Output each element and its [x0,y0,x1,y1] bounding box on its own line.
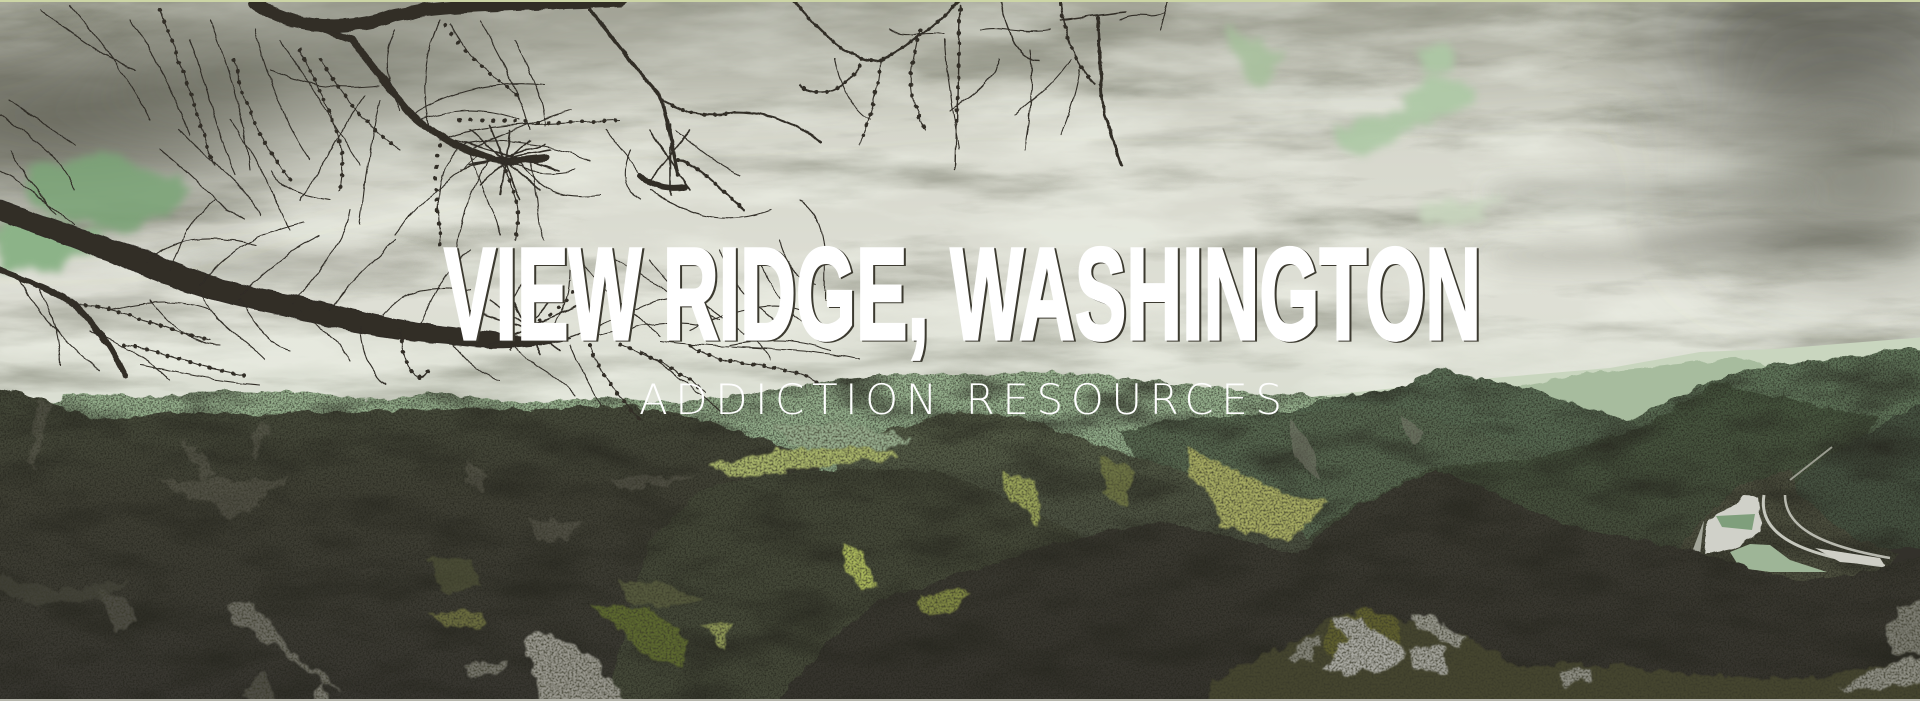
moss hill [1200,610,1920,701]
distant pale haze ridge [1100,336,1920,520]
top edge line [0,0,1920,2]
mid green hills, far right [1590,348,1920,520]
mountain range [0,336,1920,701]
grey gullies on left massif [28,400,700,540]
far green ridge, left [30,372,1500,520]
right background mountain [1260,368,1800,570]
bottom edge line [0,699,1920,701]
dense twig knots [455,125,690,355]
tree branches [0,0,1168,420]
valley town [1675,447,1900,585]
lake [1730,544,1827,572]
left massif [0,382,820,701]
green sky patches [0,20,1500,275]
grey scree on mid ridge [1290,415,1425,480]
fine twigs, lower [20,200,860,420]
left boulders [523,630,632,701]
green mid ridge [1120,405,1620,560]
dark peak and ridge [1293,382,1879,620]
central lower slopes [600,470,1180,701]
valley floor [1675,470,1900,585]
subtitle: ADDICTION RESOURCES [639,375,1282,424]
pale far hills, right [1480,358,1800,520]
central ridge [800,412,1330,640]
sky with clouds [0,0,1920,430]
right steep mountain [1790,385,1920,550]
pale valley fields [772,422,912,450]
buds along twigs [75,0,1105,420]
sunlit meadow and slopes [428,447,1330,665]
dark front hills [760,470,1920,701]
foreground rocks [0,570,1920,701]
main limbs [0,196,570,348]
fine twigs, upper [0,0,1168,260]
